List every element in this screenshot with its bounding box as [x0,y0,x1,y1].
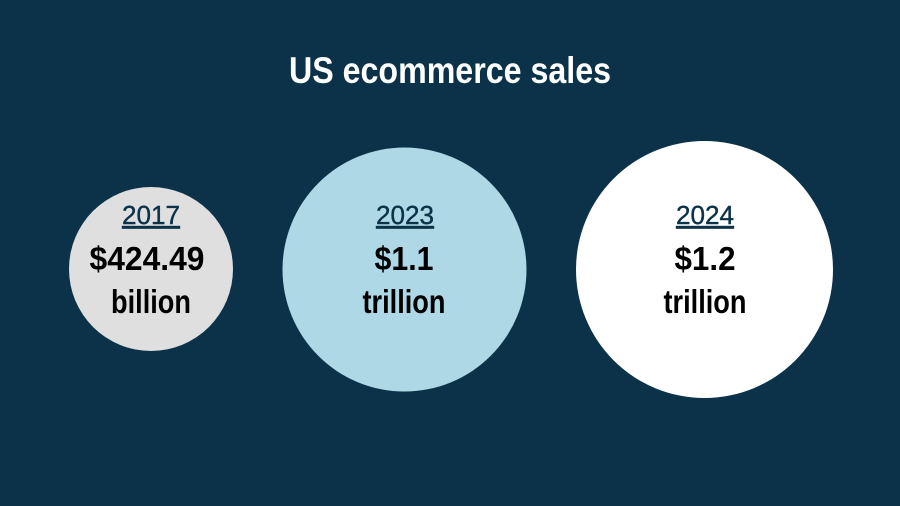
panel: 2024 sales bubble [576,141,833,398]
panel: 2017 sales bubble: billion [111,283,191,320]
panel: 2024 sales bubble: $1.2 [674,240,736,277]
panel: 2017 sales bubble: $424.49 [90,240,204,277]
title: US ecommerce sales [289,50,611,91]
panel: 2024 sales bubble: 2024 [676,200,734,230]
panel: 2024 sales bubble: trillion [664,283,746,320]
panel: 2023 sales bubble: 2023 [376,200,434,230]
panel: 2023 sales bubble [282,148,526,392]
panel: 2023 sales bubble: $1.1 [374,240,434,277]
panel: 2023 sales bubble: trillion [362,283,446,320]
panel: 2017 sales bubble [69,187,233,351]
panel: 2017 sales bubble: 2017 [122,200,180,230]
